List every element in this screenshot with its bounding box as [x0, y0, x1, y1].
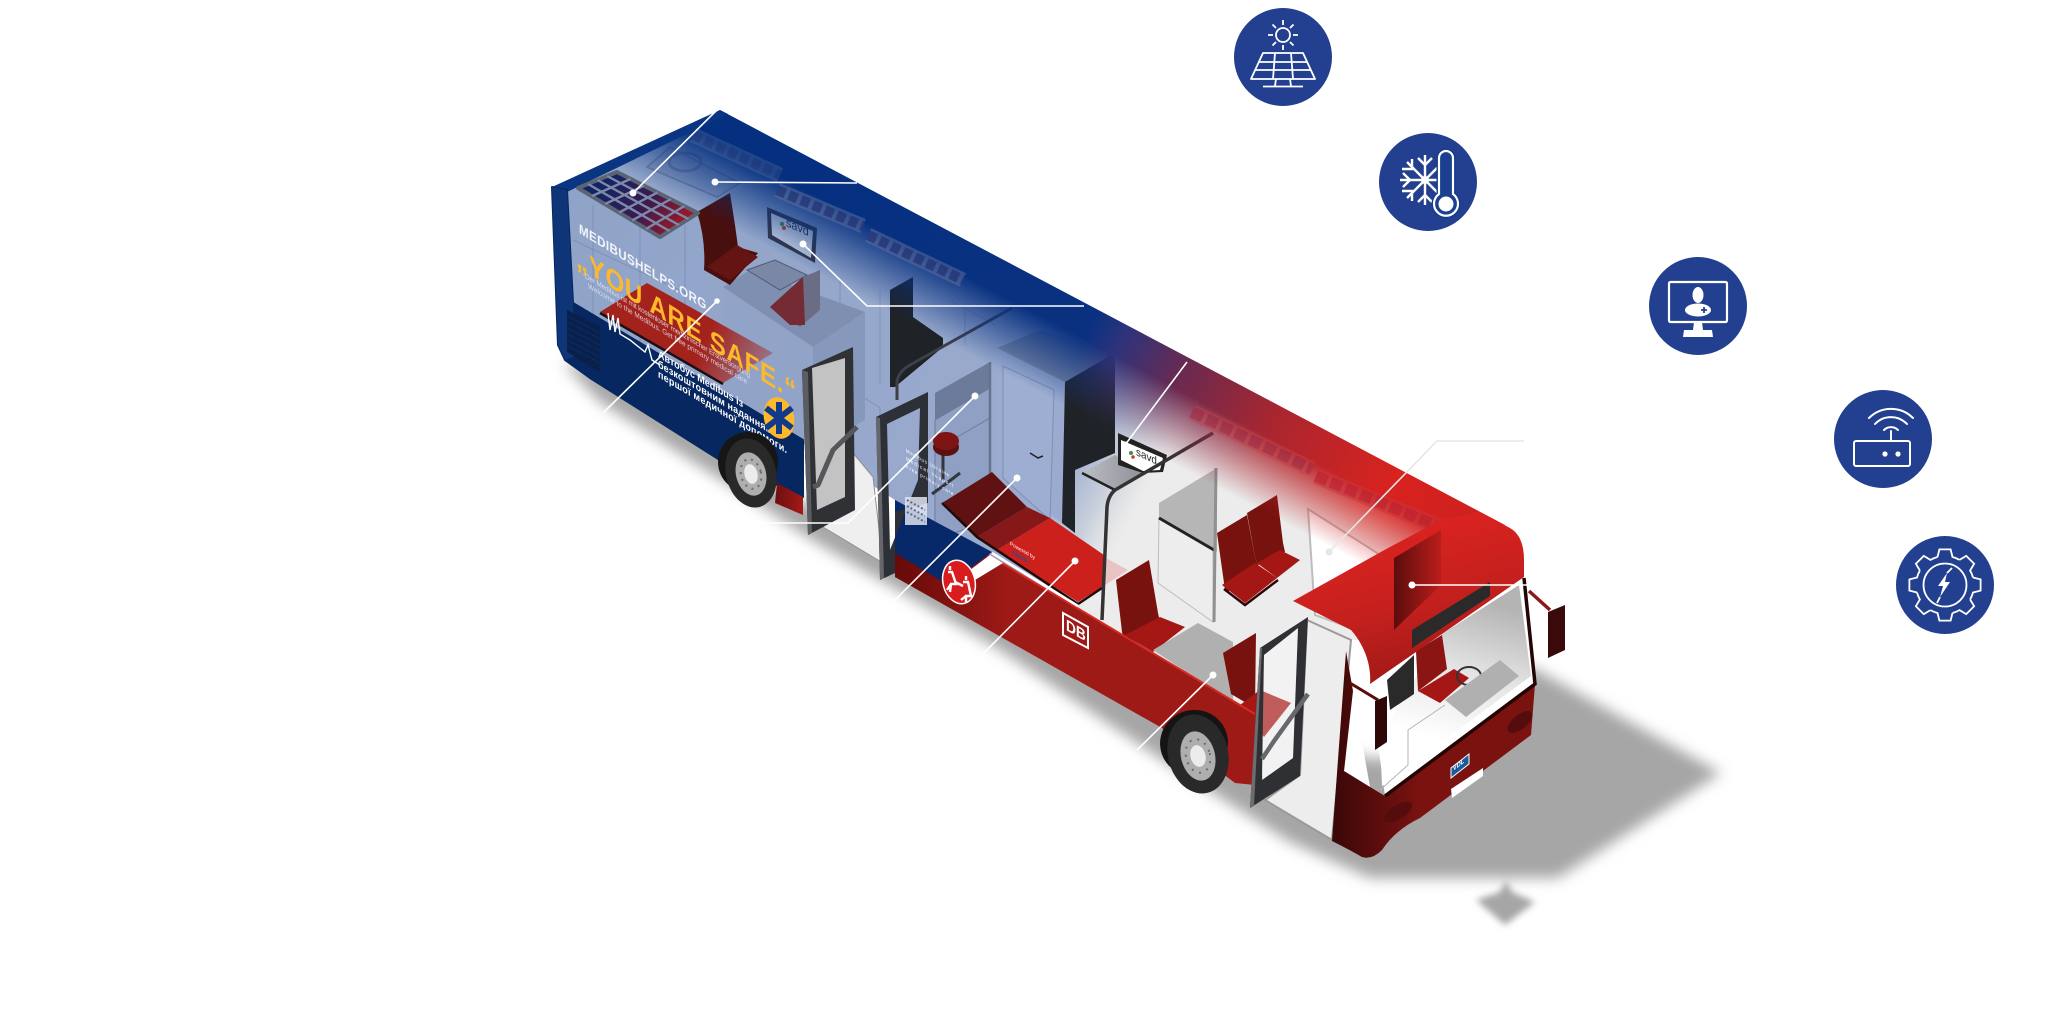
entrance floor (rear) — [823, 453, 883, 563]
front door — [1250, 617, 1308, 808]
rear handrail — [897, 308, 1012, 400]
licence plate — [1451, 768, 1483, 798]
bulkhead — [1394, 530, 1441, 630]
middle door — [876, 392, 954, 580]
VDL badge: VDL — [1453, 757, 1465, 773]
left mirror — [1350, 683, 1387, 750]
line: monitor — [803, 244, 1084, 306]
VDL badge — [1451, 754, 1469, 778]
chair: seat — [707, 245, 758, 280]
side lettering: першої медичної допомоги. — [658, 369, 787, 457]
line: lettering — [603, 301, 717, 413]
wheelchair floor area — [1153, 623, 1233, 703]
steering wheel — [1457, 667, 1481, 685]
powered by cisco: cisco — [1012, 549, 1027, 565]
floor outline — [1380, 705, 1445, 790]
door seat — [1223, 633, 1291, 737]
rear work desk with monitor and chairs — [697, 193, 865, 450]
second chair — [770, 270, 820, 327]
counter box — [723, 270, 865, 450]
icon: telemedicine monitor — [1649, 257, 1747, 355]
rear tint of interior — [562, 112, 1450, 714]
bus interior walls — [562, 112, 1450, 840]
front wheel — [1153, 703, 1237, 800]
patient bed — [942, 472, 1128, 604]
line: front door — [1329, 441, 1524, 552]
signature — [608, 313, 660, 365]
rear door — [802, 347, 857, 535]
powered by cisco: Powered by — [1010, 541, 1035, 562]
side lettering: безкоштовним наданням — [658, 358, 773, 438]
monitor — [767, 207, 817, 263]
side lettering: Welcome to the Medibus. Get free primary medical care — [588, 281, 747, 386]
white behind windscreen — [1370, 577, 1535, 796]
driver seat — [1416, 635, 1469, 703]
entrance floor (front) — [1265, 620, 1351, 840]
front end of bus — [1293, 512, 1565, 858]
red stripe behind rear wheel — [775, 483, 803, 515]
roof air conditioner — [647, 147, 740, 197]
headlights — [1381, 707, 1536, 826]
engine grille — [567, 310, 600, 372]
ground shadow — [562, 362, 1721, 925]
right mirror — [1529, 591, 1565, 658]
door handle — [1030, 453, 1043, 458]
roof rear edge — [552, 110, 728, 192]
front desk with monitor — [1082, 433, 1167, 490]
roof cap — [1293, 512, 1524, 684]
front door leaf inside — [1308, 509, 1385, 640]
side window — [1344, 691, 1370, 787]
dashboard — [1445, 660, 1519, 717]
lower front — [1332, 651, 1535, 858]
DB logo — [1063, 613, 1088, 648]
stool — [932, 432, 960, 494]
icon: solar panel and sun — [1234, 8, 1332, 106]
roof solar strips front — [1192, 412, 1452, 532]
monitor: savd — [786, 215, 809, 239]
chair: back — [697, 193, 758, 285]
line: bulkhead — [1412, 584, 1529, 586]
handrail — [1102, 433, 1213, 620]
red panel with lettering backdrop — [600, 283, 773, 384]
black storage column — [890, 277, 943, 387]
table top — [747, 260, 807, 290]
side lettering: MEDIBUSHELPS.ORG — [579, 221, 706, 313]
side lettering: Der Medibus ist mit kostenloser medizinischer Erstversorgung — [585, 271, 750, 380]
rear body panel — [552, 187, 803, 497]
solar panel at rear — [578, 172, 698, 237]
roof solar strips rear — [693, 135, 963, 280]
side lettering: Автобус Medibus із — [658, 348, 743, 410]
paired seats — [1217, 495, 1300, 605]
windscreen — [1380, 585, 1531, 786]
star of life badge — [759, 394, 799, 442]
children sign — [938, 557, 980, 607]
leader lines — [603, 110, 1529, 750]
front desk with monitor: savd — [1136, 446, 1157, 468]
QR code and door text: Medical support — [906, 456, 954, 490]
line: bed — [980, 561, 1075, 657]
QR code and door text: Free primary care — [906, 464, 954, 498]
line: cabinet — [753, 396, 975, 523]
side lettering: „YOU ARE SAFE.“ — [576, 241, 796, 408]
blue panel section — [895, 500, 992, 582]
icon: snowflake and thermometer — [1379, 133, 1477, 231]
QR code and door text — [905, 448, 954, 525]
roof with colour gradient — [622, 110, 1505, 562]
partition — [1158, 468, 1217, 622]
driver cabin wall — [1387, 655, 1414, 710]
windscreen frame — [1385, 578, 1535, 796]
line: telemedicine — [1125, 362, 1187, 445]
QR code and door text: Medibus Ukraine — [906, 448, 949, 479]
line: climate — [715, 182, 857, 183]
rear wheel — [712, 426, 784, 513]
medical cabinet — [935, 362, 990, 540]
icon: gear with lightning — [1896, 536, 1994, 634]
leader dots — [630, 178, 1416, 678]
line: solar — [633, 110, 717, 193]
panel top highlight — [985, 553, 1255, 714]
destination display — [1412, 582, 1490, 648]
interior wall panel lines — [573, 205, 995, 500]
toilet cubicle — [997, 330, 1117, 533]
white line beside bed — [992, 553, 1078, 606]
line: toilet — [888, 478, 1017, 607]
rear corner strip — [552, 187, 576, 360]
white stripe — [970, 555, 1003, 580]
second chair seat — [770, 277, 805, 325]
front side panel — [895, 500, 1255, 785]
single seat — [1116, 560, 1185, 654]
line: wheelchair — [1137, 675, 1213, 750]
icon: wifi router — [1834, 390, 1932, 488]
DB logo: DB — [1066, 617, 1086, 646]
